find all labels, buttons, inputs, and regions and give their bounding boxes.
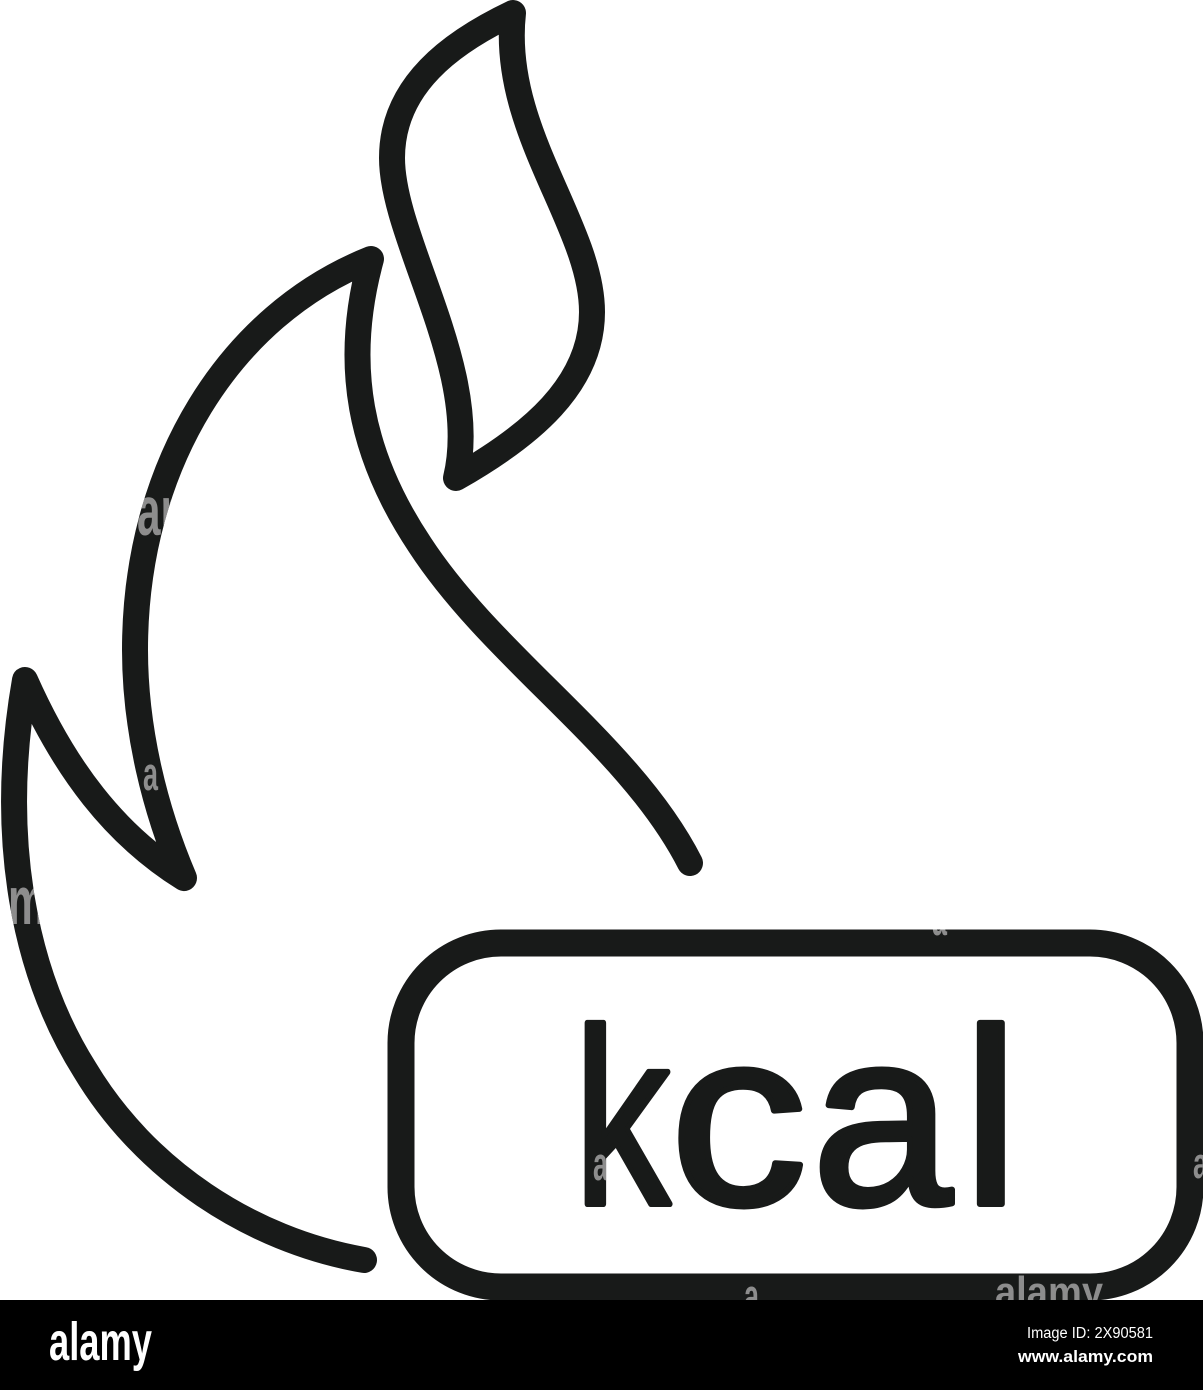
watermark fragments: a [744,1269,759,1322]
badge label: kcal: c [670,978,807,1257]
watermark fragments: alamy [995,1268,1104,1315]
badge label: kcal: a [812,978,953,1257]
icon: upper flame [392,13,592,478]
footer text: website: www.alamy.com [1017,1347,1153,1366]
badge label: kcal: l [963,978,1019,1257]
icon: large flame outline [14,259,690,1260]
watermark fragments [8,472,1203,1322]
badge: rounded rectangle [401,943,1190,1287]
watermark fragments: ar [137,472,177,550]
footer bar [0,1300,1203,1390]
watermark fragments: a [593,1137,608,1190]
watermark fragments: a [143,747,158,800]
watermark fragments: m [8,863,46,939]
badge label: kcal: k [574,978,671,1257]
footer logo: alamy: alamy [49,1312,152,1372]
watermark fragments: a [932,892,947,945]
footer text: image id: Image ID: 2X90581 [1027,1325,1153,1342]
